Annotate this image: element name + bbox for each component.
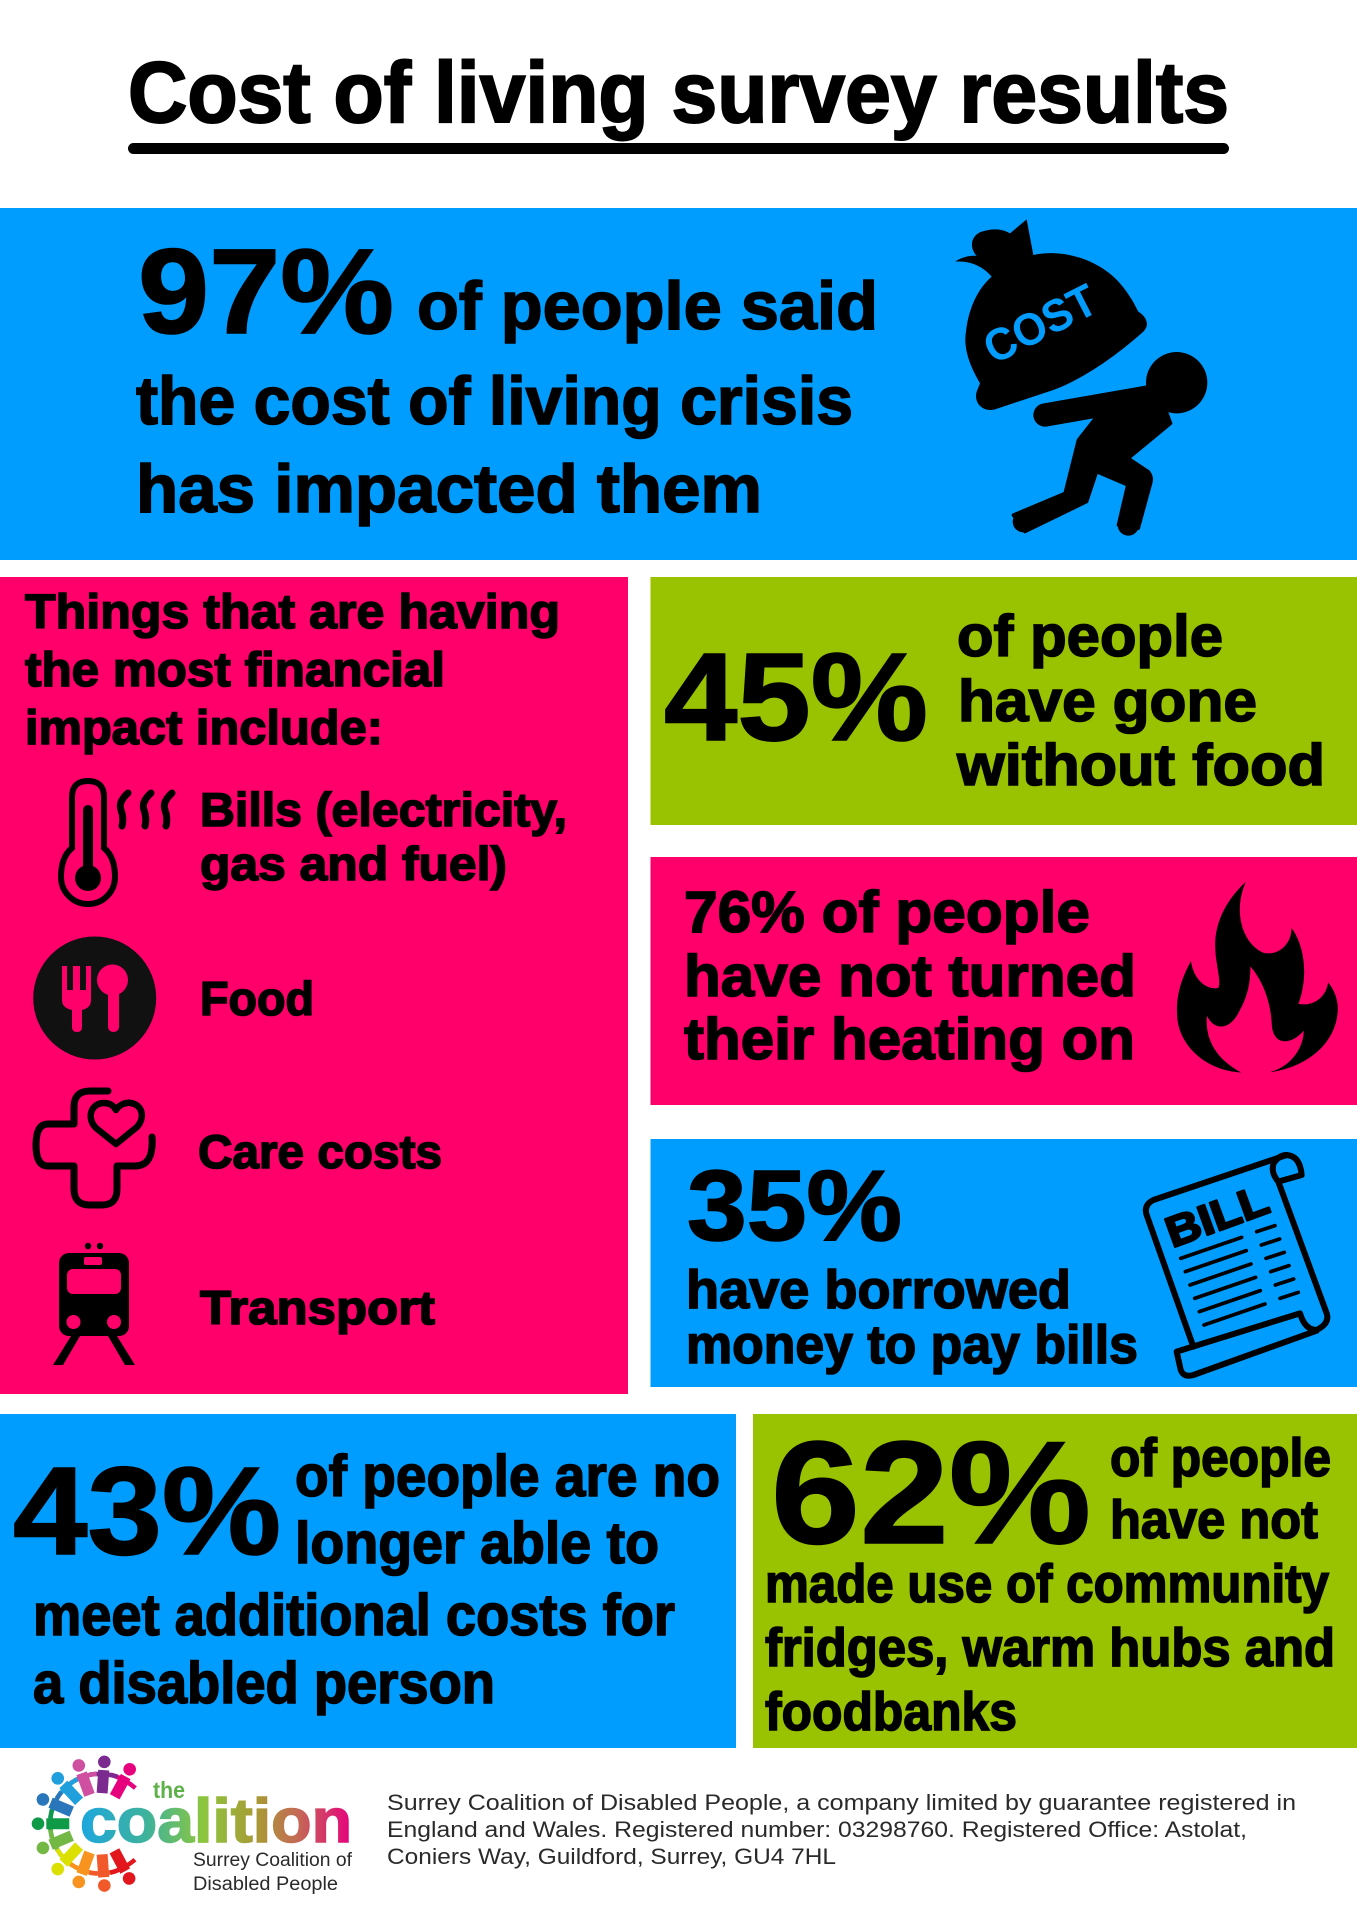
panel: 62% community support bbox=[753, 1411, 1357, 1748]
logo subtitle: Surrey Coalition of bbox=[193, 1850, 353, 1871]
icon: fork and spoon bbox=[33, 936, 156, 1060]
stat: 62%: 62% bbox=[771, 1411, 1091, 1574]
logo subtitle: Disabled People bbox=[193, 1874, 338, 1895]
text: 62% description: fridges, warm hubs and bbox=[765, 1618, 1335, 1678]
text: 76% description: their heating on bbox=[684, 1007, 1135, 1072]
stat: 97%: 97% bbox=[138, 223, 394, 359]
text: 43% description: longer able to bbox=[295, 1511, 659, 1576]
label: transport: Transport bbox=[200, 1281, 435, 1334]
panel: 43% additional costs bbox=[0, 1414, 736, 1748]
panel: 45% gone without food bbox=[650, 577, 1357, 825]
heading: things having most impact bbox=[25, 586, 560, 755]
text: 45% description bbox=[956, 604, 1325, 798]
logo: the coalition bbox=[32, 1755, 353, 1895]
text: 97% description bbox=[136, 268, 878, 527]
text: 43% description bbox=[33, 1444, 720, 1716]
text: 35% description bbox=[686, 1260, 1138, 1375]
footer: legal text bbox=[387, 1790, 1296, 1869]
title: Cost of living survey results bbox=[128, 45, 1229, 141]
text: 35% description: money to pay bills bbox=[686, 1315, 1138, 1375]
text: 43% description: a disabled person bbox=[33, 1651, 495, 1716]
label: bills bbox=[200, 783, 567, 890]
icon: flame bbox=[1177, 882, 1338, 1072]
heading: things having most impact: impact include: bbox=[25, 702, 383, 755]
text: 62% description: foodbanks bbox=[765, 1682, 1017, 1742]
text: 62% description: of people bbox=[1110, 1428, 1331, 1488]
panel: financial impact list bbox=[0, 577, 628, 1394]
icon: bill scroll bbox=[1146, 1155, 1327, 1376]
text: 45% description: of people bbox=[957, 604, 1223, 669]
panel: 97% headline bbox=[0, 208, 1357, 560]
label: bills: gas and fuel) bbox=[200, 837, 507, 890]
text: 97% description: of people said bbox=[417, 268, 878, 344]
footer: legal text: Surrey Coalition of Disabled People, a company limited by guarantee registered in bbox=[387, 1790, 1296, 1815]
text: 45% description: without food bbox=[956, 733, 1325, 798]
icon: cross with heart bbox=[36, 1091, 152, 1205]
text: 45% description: have gone bbox=[958, 669, 1257, 734]
text: 62% description: have not bbox=[1110, 1490, 1318, 1550]
text: 97% description: has impacted them bbox=[136, 451, 762, 527]
stat: 45%: 45% bbox=[664, 628, 928, 767]
logo word: coalition: coalition bbox=[80, 1787, 352, 1856]
text: 97% description: the cost of living crisis bbox=[136, 363, 853, 439]
icon: thermometer with heat waves bbox=[61, 781, 172, 904]
label: bills: Bills (electricity, bbox=[200, 783, 567, 836]
text: 76% description bbox=[684, 880, 1136, 1072]
icon label: BILL: BILL bbox=[1159, 1176, 1275, 1257]
logo word: the: the bbox=[153, 1777, 185, 1803]
icon: train bbox=[53, 1243, 135, 1365]
stat: 35%: 35% bbox=[687, 1150, 902, 1262]
footer: legal text: England and Wales. Registered number: 03298760. Registered Office: Astolat, bbox=[387, 1817, 1247, 1842]
label: care costs: Care costs bbox=[198, 1125, 442, 1178]
label: food: Food bbox=[200, 972, 314, 1025]
logo ring of people bbox=[32, 1755, 145, 1893]
panel: 76% heating bbox=[650, 857, 1357, 1105]
icon: figure carrying cost bag bbox=[955, 219, 1207, 536]
text: 76% description: 76% of people bbox=[684, 880, 1090, 945]
heading: things having most impact: Things that are having bbox=[25, 586, 560, 639]
logo subtitle bbox=[193, 1850, 353, 1895]
text: 35% description: have borrowed bbox=[686, 1260, 1071, 1320]
text: 62% description bbox=[765, 1428, 1335, 1742]
text: 43% description: meet additional costs for bbox=[33, 1583, 675, 1648]
icon label: COST: COST bbox=[975, 274, 1106, 374]
heading: things having most impact: the most financial bbox=[25, 644, 445, 697]
footer: legal text: Coniers Way, Guildford, Surrey, GU4 7HL bbox=[387, 1844, 836, 1869]
stat: 43%: 43% bbox=[13, 1442, 281, 1581]
panel: 35% borrowed money bbox=[650, 1139, 1357, 1387]
text: 76% description: have not turned bbox=[684, 944, 1136, 1009]
text: 43% description: of people are no bbox=[295, 1444, 720, 1509]
